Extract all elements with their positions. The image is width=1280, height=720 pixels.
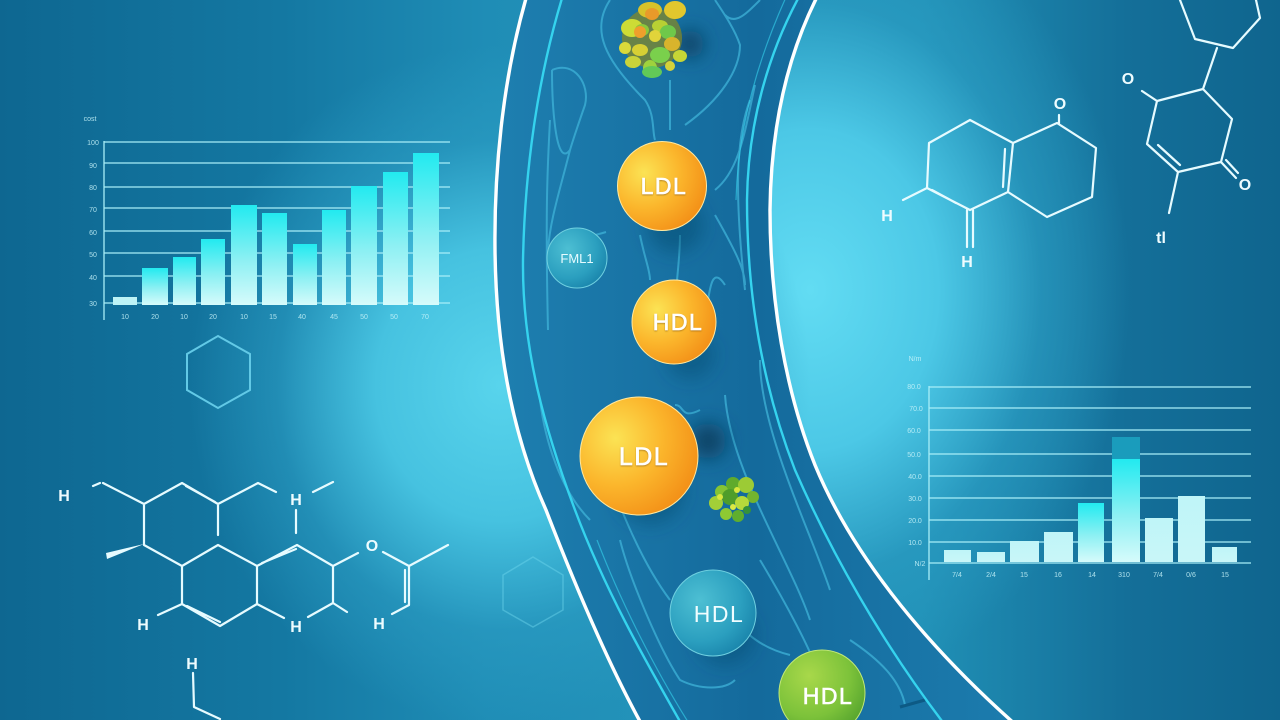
y axis ticks <box>87 140 99 308</box>
hexagon outline <box>187 336 250 408</box>
atom labels <box>881 96 1066 271</box>
y axis ticks: 30.0 <box>908 496 922 503</box>
y axis ticks: 90 <box>89 163 97 170</box>
y axis ticks: 50 <box>89 252 97 259</box>
atom labels: O <box>1122 71 1134 88</box>
particle: HDL green: HDL <box>803 683 853 709</box>
x axis ticks: 15 <box>1020 572 1028 579</box>
atom labels: H <box>137 617 149 634</box>
bonds <box>93 482 448 719</box>
bonds <box>903 115 1096 247</box>
chart axis label: N/m <box>909 356 922 363</box>
atom labels: H <box>881 208 893 225</box>
x axis ticks: 0/6 <box>1186 572 1196 579</box>
x axis ticks: 15 <box>1221 572 1229 579</box>
x axis ticks: 50 <box>390 314 398 321</box>
x axis ticks <box>121 314 429 321</box>
x axis ticks: 70 <box>421 314 429 321</box>
x axis ticks: 10 <box>121 314 129 321</box>
bars <box>113 153 439 305</box>
faint hexagon outline <box>503 557 563 627</box>
x axis ticks: 10 <box>180 314 188 321</box>
dark shadows <box>616 30 755 665</box>
atom labels <box>1122 71 1251 247</box>
particle: HDL orange <box>632 280 716 364</box>
particle: HDL green <box>779 650 865 720</box>
x axis ticks: 2/4 <box>986 572 996 579</box>
y axis ticks: 70.0 <box>909 406 923 413</box>
atom labels: H <box>290 619 302 636</box>
y axis ticks: 80.0 <box>907 384 921 391</box>
y axis ticks: 20.0 <box>908 518 922 525</box>
y axis ticks: 80 <box>89 185 97 192</box>
atom labels: H <box>961 254 973 271</box>
atom labels: H <box>290 492 302 509</box>
bonds <box>1142 0 1260 213</box>
particle: LDL top <box>618 142 706 230</box>
x axis ticks: 10 <box>240 314 248 321</box>
atom labels: H <box>186 656 198 673</box>
atom labels <box>58 488 385 673</box>
y axis ticks: 60 <box>89 230 97 237</box>
bars <box>944 437 1237 562</box>
y axis ticks: 40.0 <box>908 474 922 481</box>
x axis ticks: 20 <box>209 314 217 321</box>
x axis ticks: 7/4 <box>1153 572 1163 579</box>
y axis ticks: N/2 <box>915 561 926 568</box>
vessel wall fill <box>495 0 1016 720</box>
atom labels: O <box>366 538 378 555</box>
x axis ticks: 16 <box>1054 572 1062 579</box>
particle: HDL orange: HDL <box>653 309 703 335</box>
y axis ticks: 60.0 <box>907 428 921 435</box>
particle: LDL large: LDL <box>619 443 669 471</box>
gridlines and axes <box>104 141 450 320</box>
wedge bond <box>106 544 144 559</box>
molecule cluster: green <box>709 477 759 522</box>
atom labels: H <box>58 488 70 505</box>
x axis ticks: 50 <box>360 314 368 321</box>
atom labels: O <box>1054 96 1066 113</box>
x axis ticks: 45 <box>330 314 338 321</box>
chart axis label: cost <box>84 116 96 123</box>
gridlines and axes <box>929 386 1251 580</box>
particle: teal small <box>547 228 607 288</box>
particle: LDL top: LDL <box>641 173 687 199</box>
inner cyan lines <box>523 0 945 720</box>
particle: teal small: FML1 <box>560 251 594 266</box>
x axis ticks: 310 <box>1118 572 1130 579</box>
x axis ticks: 7/4 <box>952 572 962 579</box>
particle: HDL teal <box>670 570 756 656</box>
y axis ticks: 70 <box>89 207 97 214</box>
vessel inner branching lines <box>540 0 925 707</box>
x axis ticks: 40 <box>298 314 306 321</box>
white outer walls <box>495 0 1016 720</box>
atom labels: O <box>1239 177 1251 194</box>
y axis ticks: 30 <box>89 301 97 308</box>
molecule: upper right <box>1122 0 1260 247</box>
particle: LDL large <box>580 397 698 515</box>
particle: HDL teal: HDL <box>694 601 744 627</box>
bar chart: right <box>907 356 1251 580</box>
atom labels: tl <box>1156 230 1166 247</box>
molecule cluster: top <box>619 1 687 78</box>
y axis ticks: 50.0 <box>907 452 921 459</box>
molecule: lower left <box>58 482 448 719</box>
bar chart: left <box>84 116 450 321</box>
x axis ticks <box>952 572 1229 579</box>
molecule: upper centre right <box>881 96 1096 271</box>
x axis ticks: 14 <box>1088 572 1096 579</box>
y axis ticks: 10.0 <box>908 540 922 547</box>
y axis ticks: 100 <box>87 140 99 147</box>
y axis ticks <box>907 384 926 568</box>
x axis ticks: 15 <box>269 314 277 321</box>
atom labels: H <box>373 616 385 633</box>
y axis ticks: 40 <box>89 275 97 282</box>
artery vessel <box>495 0 1016 720</box>
x axis ticks: 20 <box>151 314 159 321</box>
